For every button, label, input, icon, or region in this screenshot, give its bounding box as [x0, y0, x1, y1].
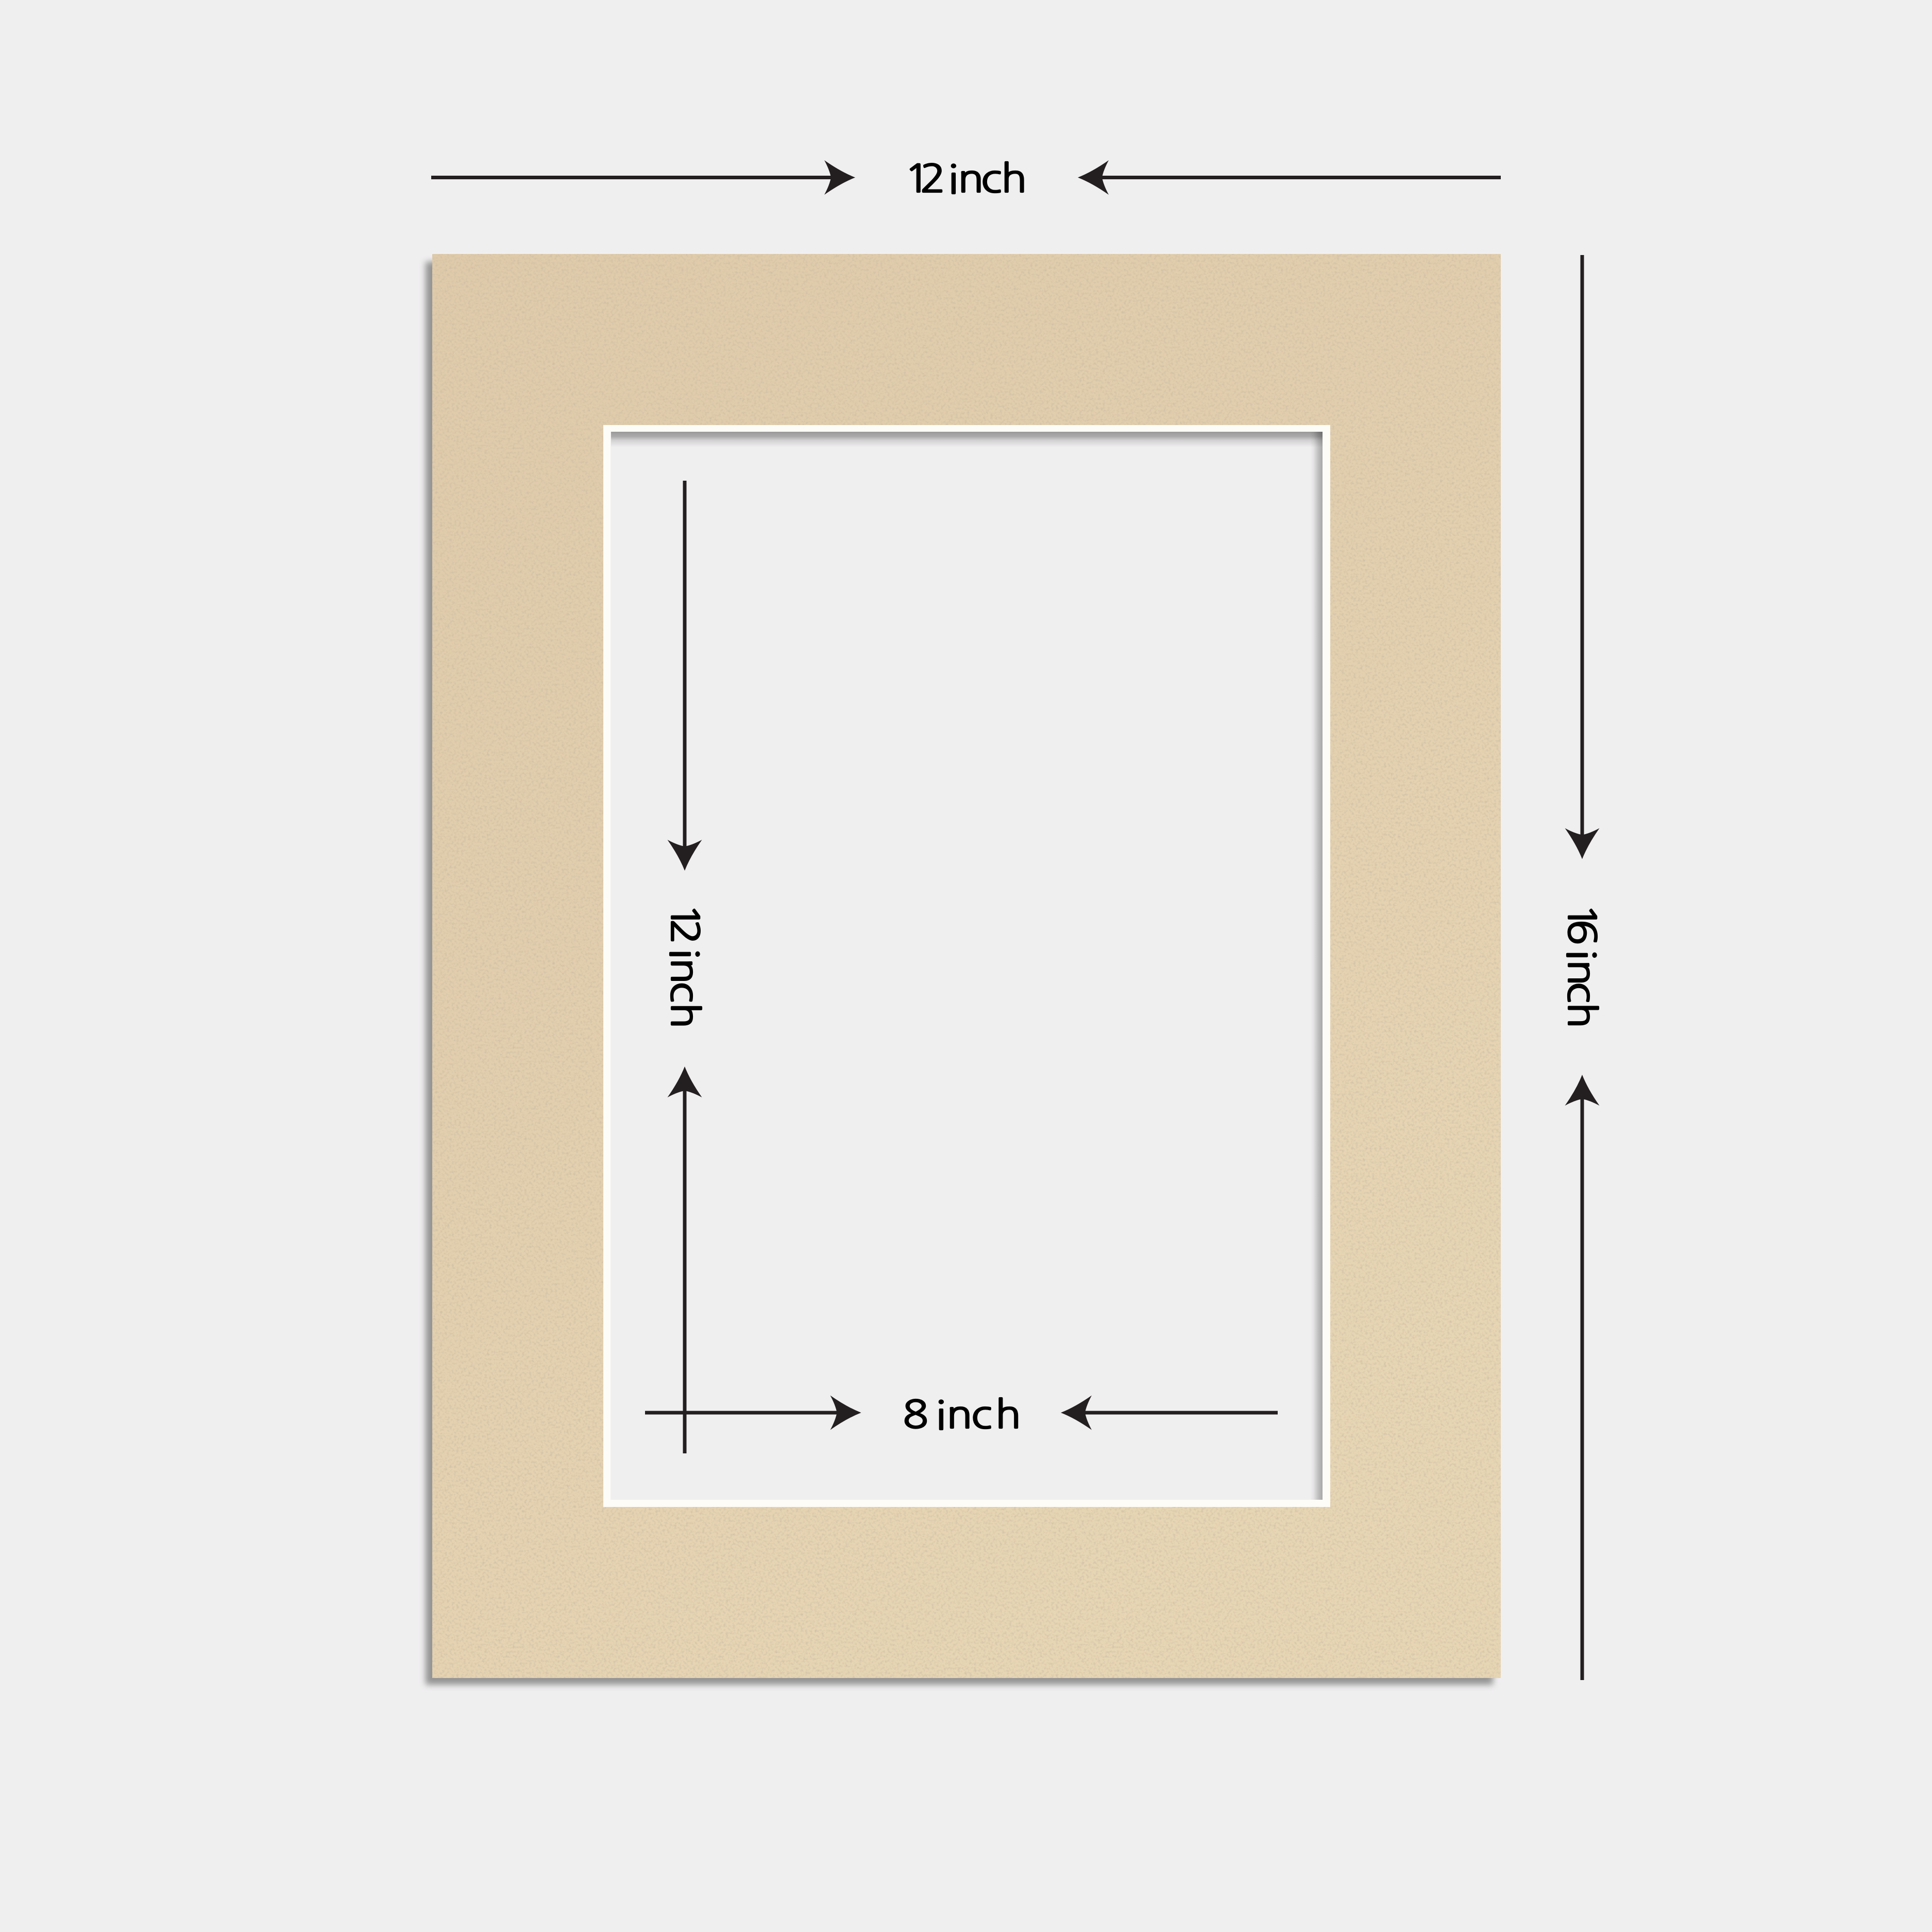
label: 8 inch: 8 inch	[903, 1396, 1021, 1434]
board drop shadow	[426, 262, 1493, 1685]
inner window shadows	[611, 432, 1323, 1500]
panel: tan mat board with window	[432, 254, 1501, 1678]
window background	[603, 425, 1330, 1507]
arrow: window height bottom	[668, 1066, 702, 1453]
arrow: outer width right	[1078, 160, 1501, 195]
white bevel of the window	[603, 425, 1330, 1507]
arrow: outer height top	[1565, 255, 1599, 859]
dimension: window height 12 inch	[666, 481, 703, 1453]
label: 12 inch window: 12 inch	[666, 903, 703, 1029]
dimension: outer width 12 inch	[431, 160, 1501, 198]
label: 16 inch: 16 inch	[1563, 903, 1600, 1028]
arrow: window height top	[668, 481, 702, 871]
label: 12 inch top: 12 inch	[904, 160, 1027, 198]
arrow: window width right	[1061, 1395, 1278, 1430]
dimension: outer height 16 inch	[1563, 255, 1600, 1680]
arrow: outer width left	[431, 160, 855, 195]
arrow: window width left	[645, 1395, 861, 1430]
dimension: window width 8 inch	[645, 1395, 1278, 1434]
arrow: outer height bottom	[1565, 1075, 1599, 1680]
